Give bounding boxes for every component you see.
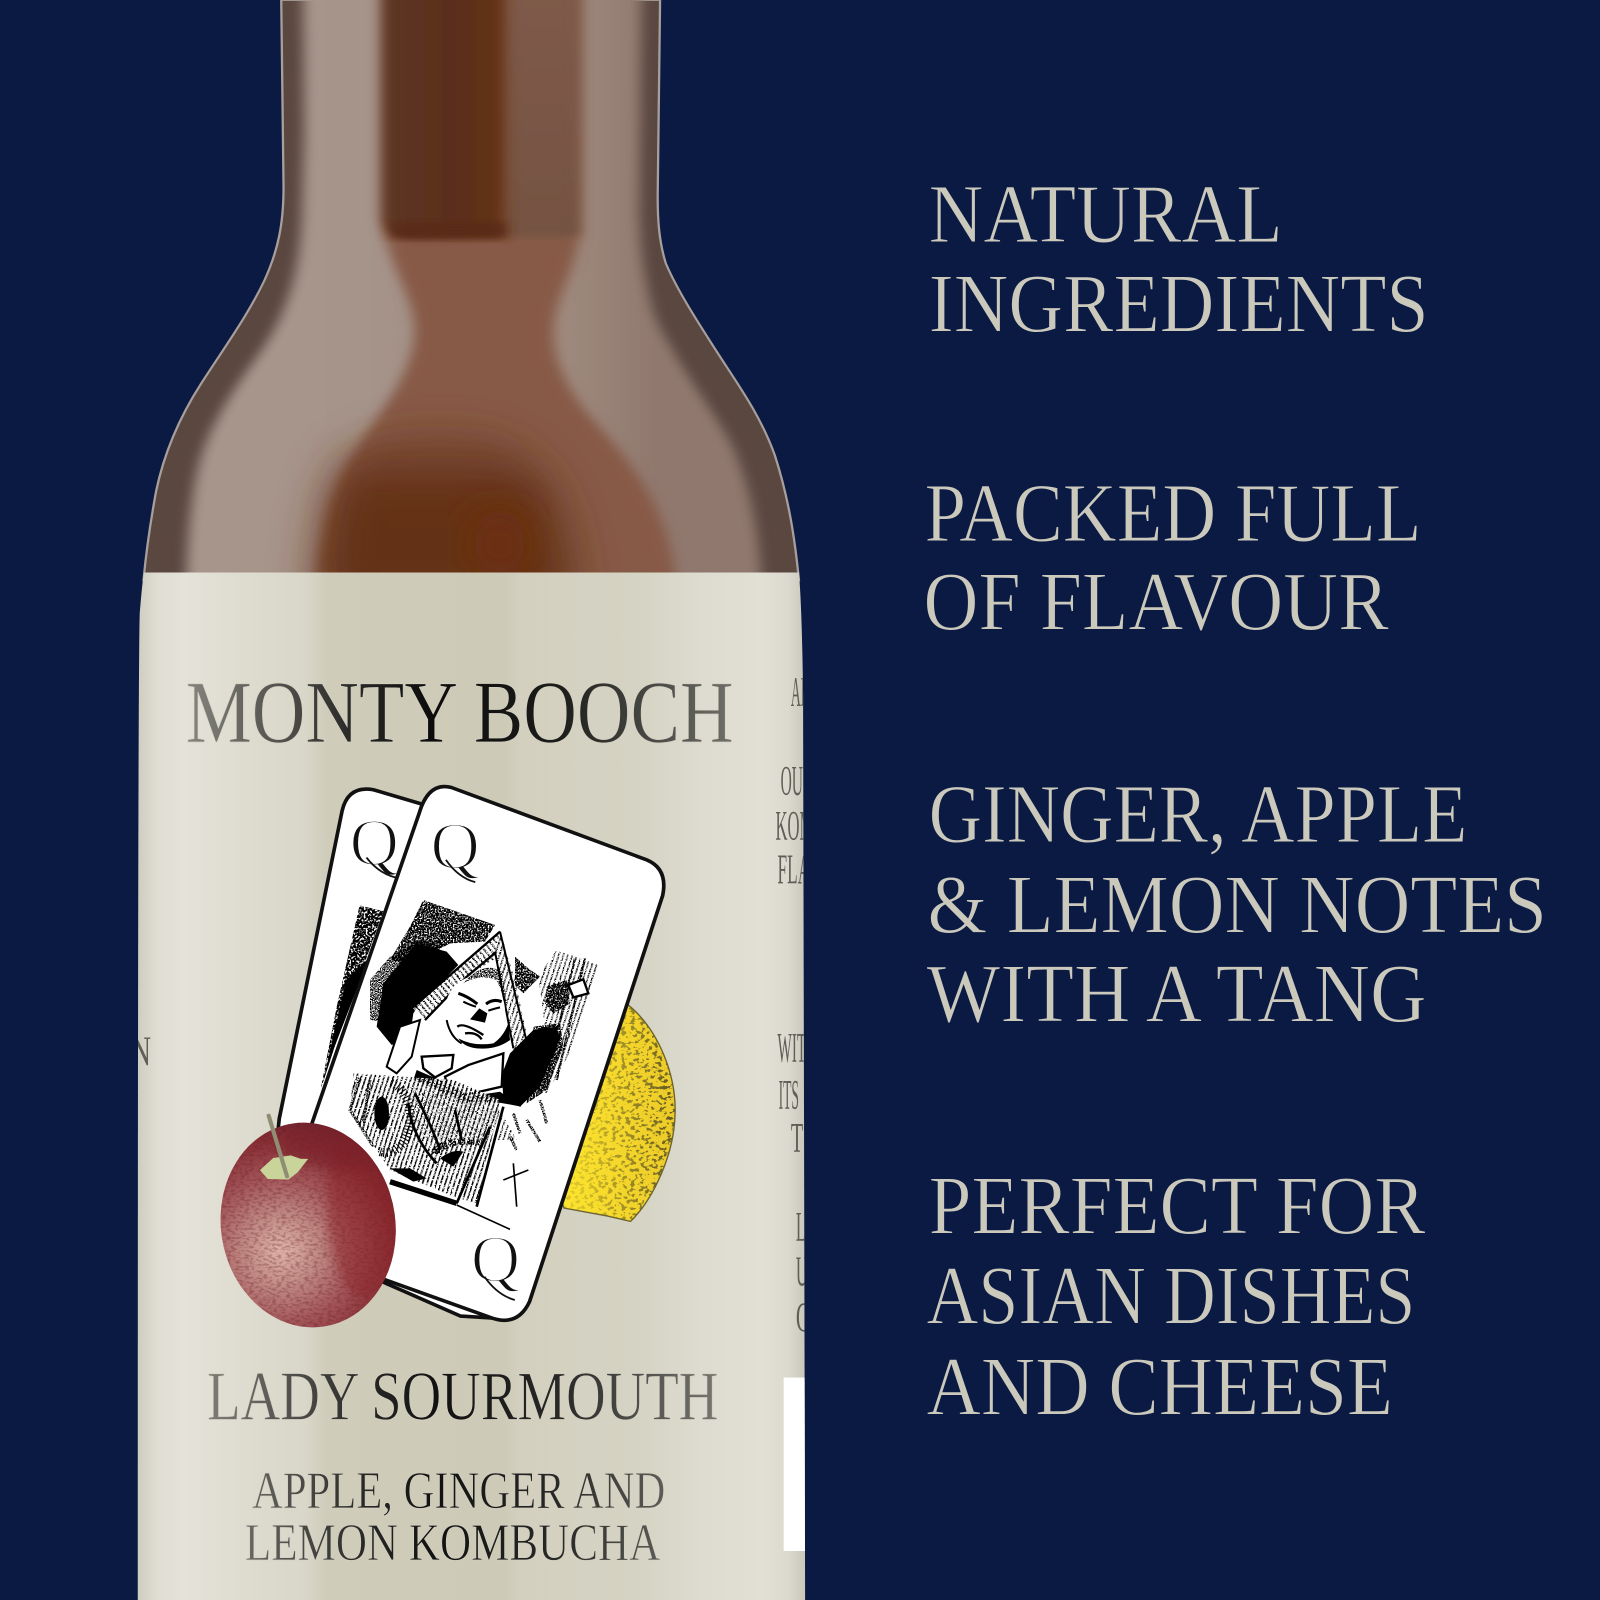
face	[445, 968, 510, 1049]
infographic canvas: KOM	[776, 804, 814, 850]
sceptre shaft	[547, 958, 585, 1080]
flavour line one: APPLE, GINGER AND	[252, 1462, 665, 1520]
icon: lemon	[562, 1004, 676, 1222]
back card letter Q: Q	[349, 805, 399, 880]
queen engraving: upper figure	[370, 900, 598, 1140]
claim: perfect for asian dishes and cheese: ASIAN DISHES	[927, 1249, 1415, 1342]
claim: packed full of flavour	[923, 467, 1421, 649]
necklace arc	[433, 1141, 480, 1153]
claim: perfect for asian dishes and cheese	[927, 1160, 1426, 1433]
claim: packed full of flavour: OF FLAVOUR	[923, 556, 1389, 649]
infographic canvas: FLA	[778, 848, 810, 894]
claim: perfect for asian dishes and cheese: PERFECT FOR	[929, 1160, 1426, 1253]
paper label	[131, 572, 814, 1600]
infographic canvas: OUR	[781, 759, 813, 805]
apple calyx	[260, 1155, 308, 1179]
sceptre hatching	[533, 950, 598, 1093]
claim: natural ingredients	[929, 168, 1429, 351]
dark neck column	[383, 0, 505, 239]
claim: packed full of flavour: PACKED FULL	[924, 467, 1421, 560]
front playing card	[272, 787, 664, 1320]
shawl hatching	[410, 1087, 517, 1140]
speckled backdrop	[390, 900, 495, 963]
dark sleeve mass	[502, 1027, 559, 1107]
label illustration	[268, 787, 681, 1320]
claim: natural ingredients: NATURAL	[929, 168, 1283, 261]
back card engraving sliver	[321, 905, 383, 1090]
crown right edge	[495, 932, 528, 1048]
apple layer	[220, 1114, 396, 1328]
claim: ginger, apple and lemon notes	[927, 768, 1547, 1040]
claim: ginger, apple and lemon notes: & LEMON NOTES	[928, 859, 1547, 952]
queen's hand on sceptre	[568, 979, 588, 997]
floor line thin	[457, 1205, 510, 1229]
front card bottom letter Q: Q	[471, 1222, 520, 1296]
hem shadow	[440, 1151, 463, 1167]
sceptre dark grip	[545, 980, 570, 1013]
right neck tint	[505, 0, 580, 237]
tatter marks	[510, 1100, 547, 1150]
apple stem	[269, 1116, 287, 1176]
sleeve fringe	[527, 1023, 563, 1103]
claim: perfect for asian dishes and cheese: AND CHEESE	[927, 1340, 1393, 1433]
claim: ginger, apple and lemon notes: GINGER, APPLE	[929, 768, 1467, 861]
wrap-around side copy: N	[131, 1029, 151, 1075]
back playing card	[268, 789, 497, 1318]
skirt hatching	[350, 1073, 500, 1203]
product name: LADY SOURMOUTH	[207, 1358, 718, 1435]
wrap-around side copy: L	[796, 1205, 806, 1251]
ruff wheel	[350, 1077, 410, 1153]
crown left edge	[412, 932, 500, 1020]
collar flare	[515, 957, 540, 993]
dark shadow below scarf	[413, 1070, 522, 1107]
neck scarf	[445, 1053, 503, 1095]
wrap-around side copy	[131, 670, 814, 1551]
dress folds	[408, 1093, 503, 1207]
claim: ginger, apple and lemon notes: WITH A TANG	[927, 947, 1427, 1040]
front card top letter Q: Q	[430, 809, 480, 884]
glass highlight	[186, 0, 762, 589]
central glow	[474, 504, 525, 585]
bottle glass	[143, 0, 799, 598]
amber liquid core	[316, 0, 677, 594]
infographic canvas: AL	[791, 670, 809, 716]
lower dark amber	[317, 421, 574, 598]
wrap-around side copy: C	[796, 1296, 810, 1342]
throne shadow	[390, 1168, 427, 1182]
label body	[138, 572, 805, 1600]
dark backdrop fringe	[370, 940, 443, 1023]
left shoulder	[387, 1020, 420, 1073]
floor line bold	[390, 1182, 457, 1203]
crown right band	[495, 932, 530, 1050]
queen engraving: lower figure	[350, 1073, 547, 1229]
wrap-around side copy: ITS	[779, 1073, 799, 1119]
queen's fist	[422, 1055, 453, 1077]
solid dark backdrop	[377, 943, 458, 1045]
infographic canvas: WIT	[778, 1026, 806, 1072]
sword hilt	[503, 1163, 528, 1207]
neck shelf	[390, 222, 505, 238]
wrap-around side copy: U	[796, 1250, 808, 1296]
bottle silhouette	[143, 0, 799, 580]
crown left band	[412, 932, 507, 1020]
icon: apple	[220, 1114, 396, 1328]
brand name: MONTY BOOCH	[186, 664, 734, 762]
claim: natural ingredients: INGREDIENTS	[929, 258, 1429, 351]
wrap-around side copy: T	[791, 1116, 803, 1162]
flavour line two: LEMON KOMBUCHA	[245, 1514, 660, 1572]
